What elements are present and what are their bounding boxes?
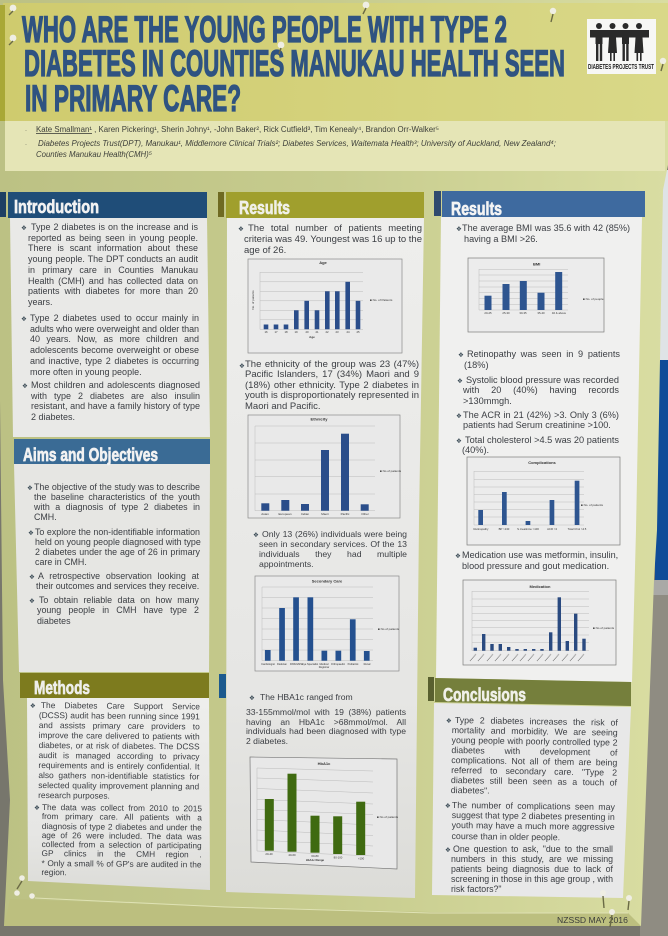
text: methods bullet 1: and assists primary care providers to [39, 720, 200, 731]
chart: Age: 24 [346, 330, 350, 334]
text: ❖ [29, 597, 35, 605]
text: results bullet medication [455, 550, 618, 571]
title: IN PRIMARY CARE? [25, 78, 241, 119]
chart: Ethnicity [248, 415, 402, 518]
text: methods bullet 1: also gathers non-identifiable statistics for [38, 770, 199, 781]
chart: Age: 16 [264, 330, 268, 334]
text: ❖ [21, 315, 27, 323]
text: aims bullet 1: CMH. [34, 512, 57, 522]
title [22, 9, 565, 119]
text: introduction bullet 1: patients with diabetes for more than 20 [28, 286, 198, 296]
text: methods bullet 1 [30, 700, 200, 801]
text: methods bullet 1: requirements and is entirely confidential. It [38, 760, 199, 771]
text: results bullet retinopathy [458, 348, 620, 370]
text: ❖ [34, 803, 40, 811]
chart: Secondary Care: Renal [364, 662, 371, 666]
text: ❖ [27, 484, 33, 492]
chart: Age: ■ No. of Patients [370, 298, 393, 302]
text: results bullet total patients: criteria was 49. Youngest was 16 up to the [244, 234, 422, 244]
panel: Introduction: Introduction [14, 197, 99, 217]
text: methods bullet 2: age of 26 were included. The data was [42, 829, 202, 841]
text: aims bullet 1: the baseline characteristics of the youth [34, 492, 200, 502]
text: results bullet ethnicity: (18%) other ethnicity. Type 2 diabetes in [245, 380, 419, 391]
chart: HbA1c: HbA1c Range [306, 858, 325, 862]
text: results bullet HbA1c: having an HbA1c >68mmol/mol. All [246, 717, 406, 727]
text: results bullet cholesterol [456, 434, 619, 455]
text: conclusions bullet 1: young people with poorly controlled type 2 [452, 735, 618, 748]
panel: Aims and Objectives: Aims and Objectives [23, 445, 158, 465]
text: results bullet secondary services: individuals they had multiple [259, 549, 407, 559]
text: ❖ [445, 802, 451, 810]
text: introduction bullet 2: adults who were overweight and older than [30, 324, 199, 334]
chart: BMI: 35-40 [537, 311, 545, 315]
text: aims bullet 3: their outcomes and services they receive. [36, 581, 199, 591]
chart: HbA1c [250, 757, 399, 869]
text: conclusions bullet 2: youth may have a much more aggressive [452, 820, 615, 832]
panel: Aims and Objectives [14, 439, 210, 672]
text: results bullet ACR: patients had Serum creatinine >100. [463, 420, 611, 430]
text: introduction bullet 2: 40 years. Now, as more children and [30, 334, 199, 344]
chart: Age: Age [309, 335, 315, 339]
text: results bullet BMI: having a BMI >26. [464, 234, 538, 244]
text: aims bullet 1: The objective of the study was to describe [34, 482, 200, 492]
text: results bullet ethnicity: Maori and Pacific. [245, 401, 321, 412]
text: methods bullet 1: (DCSS) audit has been running since 1991 [39, 710, 200, 721]
chart: Secondary Care: Medical [320, 662, 329, 666]
text: introduction bullet 2 [21, 313, 199, 377]
chart: Complications: S creatinine >100 [517, 527, 539, 531]
text: aims bullet 4 [29, 595, 199, 626]
text: results bullet blood pressure [457, 375, 619, 406]
text: results bullet BMI [456, 222, 630, 244]
chart: Age: 21 [315, 330, 319, 334]
chart: Ethnicity: Pacific [341, 512, 350, 516]
text: conclusions bullet 3: numbers in this study, are we missing [451, 854, 613, 864]
text: introduction bullet 3: Most children and adolescents diagnosed [31, 380, 200, 390]
text: introduction bullet 1: years. [28, 297, 53, 307]
chart: BMI: BMI [533, 262, 540, 266]
text: methods bullet 1: improve the care delivered to patients with [39, 730, 200, 741]
chart: Secondary Care: Podiatrist [348, 662, 359, 666]
text: methods bullet 1: research purposes. [38, 790, 110, 801]
chart: Age: 23 [335, 330, 339, 334]
text: introduction bullet 3 [22, 380, 200, 422]
chart: Secondary Care: Cardiologist [261, 662, 275, 666]
chart: Age: 22 [325, 330, 329, 334]
text: introduction bullet 2: and inactive, type 2 diabetes is occurring [30, 356, 199, 366]
text: ❖ [239, 362, 245, 370]
chart: Secondary Care: Dietician [277, 662, 288, 666]
chart: Ethnicity: ■ No of patients [380, 469, 402, 473]
authors and affiliations: Diabetes Projects Trust(DPT), Manukau¹, Middlemore Clinical Trials²; Diabetes Services, Waitemata Health³; University of Auckland, New Zealand⁴; [38, 139, 556, 148]
text: ❖ [458, 350, 464, 358]
chart: Secondary Care: ■ No of patients [378, 627, 400, 631]
text: ❖ [28, 528, 34, 536]
text: introduction bullet 1: Health (CMH) and has collected data on [28, 276, 198, 286]
authors and affiliations: Kate Smallman¹ , Karen Pickering¹, Sherin Johny¹, -John Baker², Rick Cutfield³, Tim Kenealy⁴, Brandon Orr-Walker⁵ [36, 125, 439, 134]
text: introduction bullet 1 [21, 222, 198, 307]
chart: HbA1c: 40-60 [288, 853, 296, 857]
chart: Ethnicity: Indian [301, 512, 309, 516]
text: ❖ [29, 573, 35, 581]
text: methods bullet 1: diabetes, or at risk of diabetes. The DCSS [39, 740, 200, 751]
text: ❖ [21, 224, 27, 232]
text: aims bullet 4: To obtain reliable data on how many [39, 595, 199, 605]
text: methods bullet 2: collected from a selection of participating [42, 839, 202, 850]
text: methods bullet 1: audit is managed according to privacy [38, 750, 200, 761]
panel: Conclusions: Conclusions [443, 685, 526, 705]
chart: Medication [463, 580, 616, 665]
chart: Secondary Care: Registrar [319, 665, 329, 669]
chart: Ethnicity: Ethnicity [311, 416, 328, 422]
text: conclusions bullet 3: One question to ask, "due to the small [453, 844, 613, 854]
chart: HbA1c: 60-80 [311, 854, 319, 858]
text: introduction bullet 3: 2 diabetes. [31, 412, 75, 422]
text: introduction bullet 1: There is scant information about these [28, 243, 198, 253]
chart: BMI: 30-35 [519, 311, 527, 315]
text: results bullet cholesterol: Total cholesterol >4.5 was 20 patients [465, 434, 619, 444]
text: introduction bullet 2: Type 2 diabetes used to occur mainly in [30, 313, 199, 323]
text: results bullet secondary services: Only 13 (26%) individuals were being [262, 529, 407, 539]
text: results bullet cholesterol: (40%). [462, 445, 489, 455]
text: conclusions bullet 2 [445, 800, 615, 842]
chart: Complications: Total Chol >4.5 [568, 527, 587, 531]
panel: Introduction [0, 192, 210, 437]
text: results bullet secondary services [253, 529, 407, 569]
text: methods bullet 2: * Only a small % of GP's are audited in the [41, 857, 202, 869]
text: methods bullet 2: The data was collect from 2010 to 2015 [42, 802, 202, 813]
text: methods bullet 1: selected quality improvement planning and [38, 780, 199, 791]
chart: HbA1c: 80-100 [334, 856, 343, 860]
chart: Age: 19 [294, 330, 298, 334]
chart: Age: Age [319, 260, 328, 265]
text: conclusions bullet 2: suggest that type 2 diabetes presenting in [452, 810, 615, 822]
chart: Ethnicity: Maori [321, 512, 329, 516]
chart: Secondary Care: Orthopaedic [331, 662, 346, 666]
chart: Ethnicity: Other [361, 512, 369, 516]
text: results bullet HbA1c [246, 692, 406, 746]
text: results bullet blood pressure: >130mmgh. [463, 396, 512, 406]
text: ❖ [30, 702, 36, 710]
text: results bullet ethnicity: Pacific Islanders, 17 (34%) Maori and 9 [245, 369, 419, 380]
text: aims bullet 2 [28, 526, 201, 567]
authors and affiliations [25, 125, 556, 159]
text: ❖ [456, 436, 462, 444]
text: methods bullet 2: region. [41, 867, 67, 877]
text: aims bullet 4: diabetes [37, 616, 71, 626]
text: conclusions bullet 3: patients being diagnosis due to lack of [451, 864, 613, 874]
text: aims bullet 4: young people in CMH have type 2 [37, 605, 199, 615]
text: results bullet retinopathy: Retinopathy was seen in 9 patients [467, 348, 620, 358]
chart: BMI: 25-30 [502, 311, 510, 315]
text: introduction bullet 3: resistant, and have a family history of type [31, 401, 200, 411]
text: conclusions bullet 1: diabetes still been seen as a touch of [451, 775, 617, 788]
text: conclusions bullet 2: The number of complications seen may [452, 800, 615, 812]
chart: Ethnicity: Asian [261, 512, 269, 516]
chart: Complications [467, 457, 620, 545]
text: results bullet total patients: The total number of patients meeting [248, 222, 422, 234]
text: aims bullet 2: To explore the non-identifiable information [35, 526, 200, 536]
text: results bullet medication: blood pressure and gout medication. [462, 560, 609, 570]
text: conclusions bullet 1: diabetes with development of [451, 745, 618, 758]
text: aims bullet 2: care in CMH. [35, 557, 87, 567]
text: results bullet total patients [238, 222, 422, 256]
text: conclusions bullet 3: screening in those in this age group , with [451, 874, 613, 884]
chart: Complications: BP >130 [499, 527, 510, 531]
text: results bullet ACR: The ACR in 21 (42%) >3. Only 3 (6%) [463, 410, 619, 420]
text: results bullet HbA1c: 2 diabetes. [246, 736, 288, 746]
text: results bullet ethnicity [239, 359, 419, 412]
text: results bullet secondary services: seen in secondary services. Of the 13 [259, 539, 407, 549]
text: introduction bullet 1: young people. The DPT conducts an audit [28, 254, 198, 264]
text: results bullet HbA1c: The HBA1c ranged from [260, 692, 353, 702]
chart: Age [248, 259, 402, 353]
text: conclusions bullet 1: Type 2 diabetes increases the risk of [455, 715, 618, 728]
chart: Complications: Retinopathy [474, 527, 489, 531]
text: aims bullet 1: with a diagnosis of type 2 diabetes in [34, 502, 200, 512]
authors and affiliations: Counties Manukau Health(CMH)⁵ [36, 150, 153, 159]
chart: Age: 17 [274, 330, 278, 334]
chart: Ethnicity: European [278, 512, 292, 516]
text: results bullet secondary services: appointments. [259, 559, 314, 569]
chart: Complications: ■ No. of patients [581, 503, 603, 507]
authors and affiliations: · [25, 128, 27, 134]
title banner [0, 3, 668, 121]
text: results bullet HbA1c: 33-155mmol/mol with 19 (38%) patients [246, 707, 406, 717]
text: ❖ [446, 717, 452, 725]
text: results bullet BMI: The average BMI was 35.6 with 42 (85%) [462, 222, 630, 232]
text: results bullet ethnicity: youth is disproportionately represented in [245, 390, 419, 401]
chart: Secondary Care: Secondary Care [312, 578, 343, 584]
chart: HbA1c: HbA1c [318, 761, 331, 766]
text: results bullet ethnicity: The ethnicity of the group was 23 (47%) [245, 359, 419, 370]
text: results bullet ACR [456, 410, 619, 430]
chart: Complications: Complications [528, 460, 557, 465]
text: methods bullet 2: from primary care. All patients with a [42, 811, 202, 822]
text: conclusions bullet 1: mortality and morbidity. We are seeing [452, 725, 618, 738]
text: introduction bullet 1: in primary care in Counties Manukau [28, 265, 198, 275]
logo: Diabetes Projects Trust [587, 19, 656, 74]
text: introduction bullet 2: more often in young people. [30, 367, 142, 377]
text: ❖ [457, 377, 463, 385]
text: methods bullet 2: diagnosis of type 2 diabetes and under the [42, 820, 202, 831]
text: ❖ [253, 531, 259, 539]
panel: Results column two: Results [451, 199, 502, 219]
authors band [5, 121, 665, 171]
chart: BMI [468, 258, 604, 332]
text: ❖ [456, 224, 462, 232]
poster lower band [4, 899, 641, 926]
text: ❖ [238, 224, 244, 232]
text: results bullet HbA1c: ❖ [249, 694, 255, 702]
chart: HbA1c: ■ No of patients [377, 815, 399, 819]
text: results bullet blood pressure: with 20 (40%) having records [463, 385, 619, 395]
text: results bullet total patients: age of 26. [244, 244, 286, 256]
text: conclusions bullet 3: risk factors?" [451, 884, 502, 894]
text: aims bullet 1 [27, 482, 200, 522]
chart: Complications: ACR >3 [547, 527, 557, 531]
chart: Medication: ■ No of patients [593, 626, 615, 630]
text: results bullet blood pressure: Systolic blood pressure was recorded [466, 375, 619, 385]
chart: Age: 25 [356, 330, 360, 334]
text: introduction bullet 1: reported as being seen in young people. [28, 233, 198, 243]
text: conclusions bullet 3 [445, 844, 613, 894]
chart: Medication: Medication [530, 584, 551, 589]
text: methods bullet 2: GP clinics in the CMH region . [42, 848, 202, 859]
text: results bullet medication: Medication use was metformin, insulin, [462, 550, 618, 560]
chart: Secondary Care [255, 576, 400, 671]
text: aims bullet 3 [29, 571, 199, 591]
text: introduction bullet 1: Type 2 diabetes is on the increase and is [31, 222, 198, 232]
chart: HbA1c: >100 [358, 856, 365, 860]
chart: Secondary Care: Eye Specialist [302, 662, 318, 666]
text: introduction bullet 2: adolescents become overweight or obese [30, 345, 199, 355]
authors and affiliations: · [25, 142, 27, 148]
chart: Age: 18 [284, 330, 288, 334]
text: ❖ [455, 552, 461, 560]
chart: BMI: 20-25 [484, 311, 492, 315]
panel: Results column one: Results [239, 198, 290, 218]
panel: Results column one [218, 192, 424, 898]
chart: BMI: ■ No. of people [583, 297, 604, 301]
text: conclusions bullet 1: referred to secondary care. "Type 2 [451, 765, 617, 778]
text: conclusions bullet 1: complications. Not all of them are being [451, 755, 617, 768]
text: ❖ [445, 846, 451, 854]
text: results bullet retinopathy: (18%) [464, 360, 489, 370]
text: aims bullet 2: held on young people diagnosed with type [35, 537, 201, 547]
text: conclusions bullet 1 [446, 715, 618, 796]
panel: Methods: Methods [34, 678, 90, 698]
chart: Secondary Care: DNS/GMS [290, 662, 302, 666]
chart: HbA1c: 20-40 [265, 852, 273, 856]
text: results bullet HbA1c: individuals had been diagnosed with type [246, 726, 406, 736]
footer line [35, 898, 628, 913]
text: aims bullet 3: A retrospective observation looking at [38, 571, 199, 581]
text: aims bullet 2: 2 diabetes under the age of 26 in primary [35, 547, 200, 557]
panel: Results column two [434, 191, 645, 682]
text: introduction bullet 3: with type 2 diabetes are also insulin [31, 391, 200, 401]
panel: Methods [20, 673, 210, 890]
chart: Age: 20 [305, 330, 309, 334]
chart: Age: No. of patients [251, 290, 255, 310]
panel: Conclusions [428, 677, 631, 898]
text: conclusions bullet 2: course than in older people. [452, 831, 560, 842]
text: methods bullet 1: The Diabetes Care Support Service [41, 700, 200, 711]
chart: BMI: 40 & above [552, 311, 567, 315]
text: ❖ [456, 412, 462, 420]
text: methods bullet 2 [34, 802, 202, 877]
text: ❖ [22, 382, 28, 390]
footer: conference label: NZSSD MAY 2016 [557, 915, 628, 925]
text: conclusions bullet 1: diabetes". [451, 785, 490, 796]
